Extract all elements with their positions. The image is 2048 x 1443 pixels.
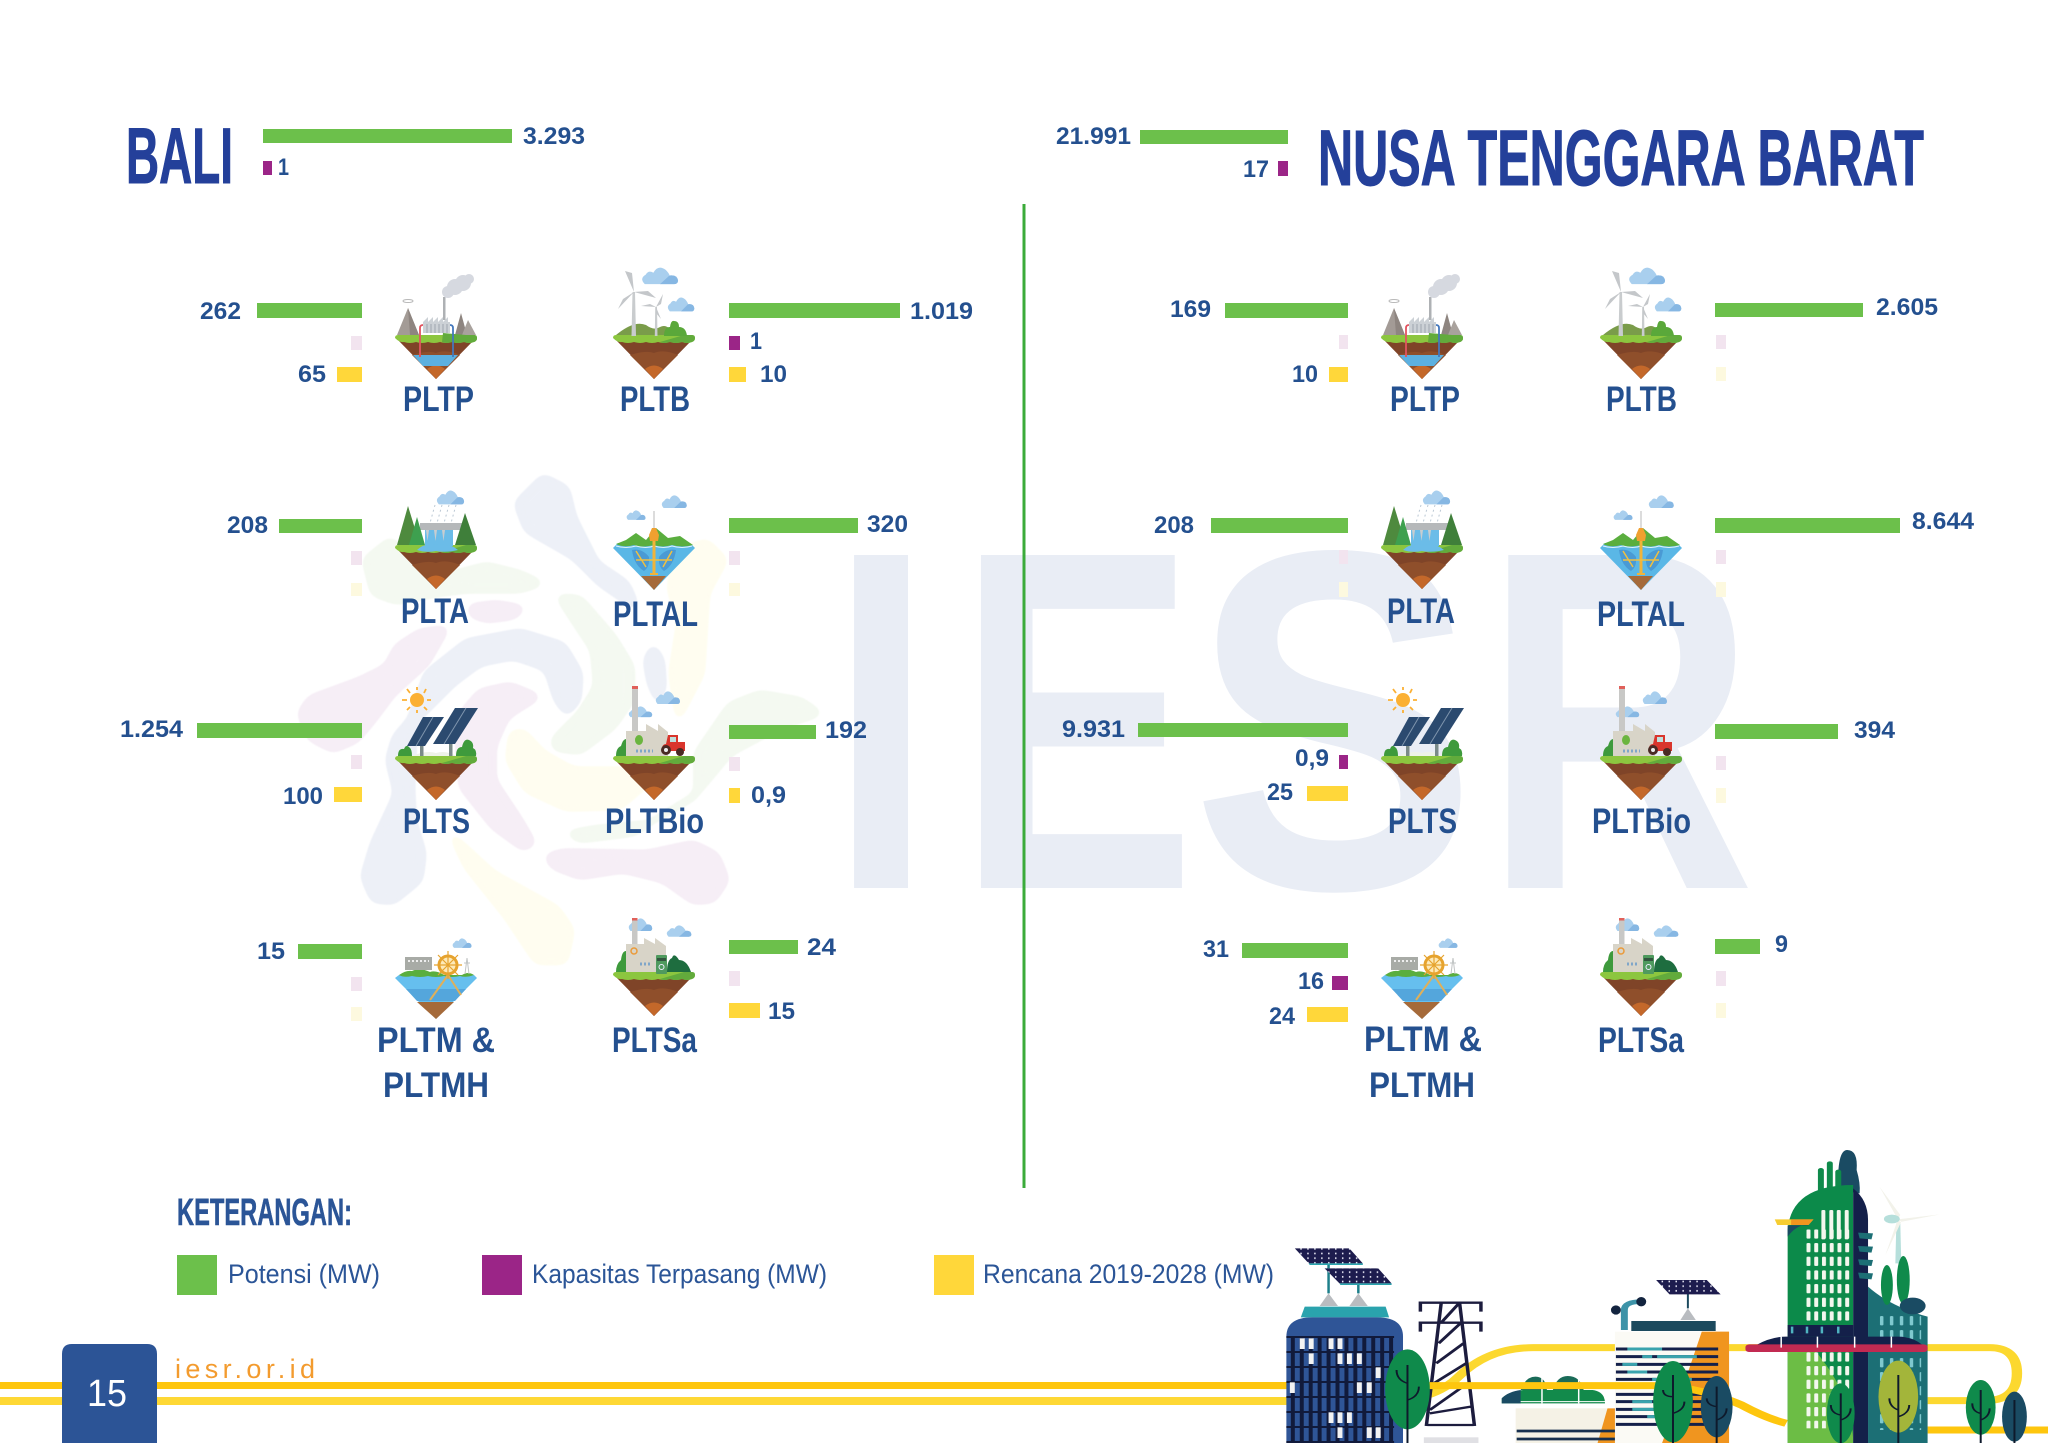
trees beside striped tower <box>1653 1361 1733 1443</box>
panel: Bali PLTB <box>613 268 973 419</box>
panel: Bali PLTA: PLTA <box>401 592 469 631</box>
watermark: IESR text: E <box>957 451 1196 991</box>
chart: Bali totals: 1 <box>278 154 289 181</box>
rail track: lower line <box>1270 1348 2048 1430</box>
building: striped tower <box>1611 1280 1729 1443</box>
panel: Bali PLTB: PLTB <box>620 380 690 419</box>
panel: Bali PLTSa <box>612 918 836 1060</box>
panel: Bali PLTS: 100 <box>283 783 323 810</box>
panel: NTB PLTS <box>1062 687 1464 841</box>
watermark: IESR text: R <box>1483 450 1756 991</box>
chart: Bali totals <box>263 123 585 181</box>
panel: NTB PLTS: 0,9 <box>1295 745 1329 772</box>
panel: NTB PLTSa: 9 <box>1775 931 1788 958</box>
green shrubs on skyscraper <box>1881 1256 1926 1314</box>
panel: Bali PLTAL: PLTAL <box>613 595 698 634</box>
panel: NTB PLTS: 25 <box>1267 779 1293 806</box>
building: green skyscraper <box>1775 1150 1928 1443</box>
panel: NTB PLTB <box>1600 268 1938 419</box>
panel: Bali PLTSa: 15 <box>768 998 795 1025</box>
panel: Bali PLTAL <box>613 495 908 634</box>
panel: NTB PLTM & PLTMH: 24 <box>1269 1003 1295 1030</box>
legend <box>177 1192 1274 1295</box>
legend item: Rencana <box>934 1255 1274 1295</box>
panel: NTB PLTBio: 394 <box>1854 717 1895 744</box>
chart: Bali totals: 3.293 <box>523 123 585 150</box>
panel: Bali PLTP: 262 <box>200 298 241 325</box>
legend item: Potensi: Potensi (MW) <box>228 1259 380 1289</box>
website url: iesr.or.id <box>175 1354 315 1384</box>
panel: NTB PLTA: PLTA <box>1387 592 1455 631</box>
panel: Bali PLTBio <box>605 686 867 841</box>
panel: NTB PLTM & PLTMH: PLTM & <box>1364 1020 1482 1059</box>
panel: Bali PLTM & PLTMH: PLTMH <box>383 1066 489 1105</box>
panel: NTB PLTS: 9.931 <box>1062 716 1125 743</box>
building: blue tower with solar panels <box>1286 1248 1403 1443</box>
panel: NTB PLTP: PLTP <box>1390 380 1460 419</box>
panel: NTB PLTP: 169 <box>1170 296 1211 323</box>
panel: Bali PLTB: 1 <box>750 328 762 355</box>
wind turbine <box>1879 1187 1940 1263</box>
chart: NTB totals: 17 <box>1243 156 1269 183</box>
panel: Bali PLTBio: PLTBio <box>605 802 704 841</box>
panel: NTB PLTAL: 8.644 <box>1912 508 1974 535</box>
panel: NTB PLTM & PLTMH: 16 <box>1298 968 1324 995</box>
panel: Bali PLTA <box>227 490 477 631</box>
panel: NTB PLTAL <box>1597 495 1974 634</box>
panel: Bali PLTBio: 0,9 <box>751 782 786 809</box>
heading: Bali: BALI <box>126 111 233 200</box>
page number tab <box>62 1344 157 1443</box>
transmission pylon <box>1420 1303 1481 1443</box>
chart: NTB totals: 21.991 <box>1056 123 1131 150</box>
panel: NTB PLTAL: PLTAL <box>1597 595 1685 634</box>
panel: NTB PLTP <box>1170 274 1463 419</box>
panel: Bali PLTS <box>120 687 478 841</box>
tree beside blue tower <box>1385 1349 1430 1443</box>
panel: Bali PLTSa: PLTSa <box>612 1021 697 1060</box>
panel: Bali PLTS: 1.254 <box>120 716 183 743</box>
panel: NTB PLTM & PLTMH: PLTMH <box>1369 1066 1475 1105</box>
panel: Bali PLTSa: 24 <box>807 934 836 961</box>
legend item: Rencana: Rencana 2019-2028 (MW) <box>983 1259 1274 1289</box>
panel: Bali PLTB: 1.019 <box>910 298 973 325</box>
panel: NTB PLTB: PLTB <box>1606 380 1677 419</box>
monorail <box>1745 1337 1928 1352</box>
legend item: Potensi <box>177 1255 380 1295</box>
legend: KETERANGAN: <box>177 1192 352 1234</box>
divider line between regions <box>1022 204 1026 1188</box>
page number tab: 15 <box>87 1373 127 1415</box>
illustration: green city <box>1270 1150 2048 1443</box>
rail track: upper line over train <box>1429 1386 1786 1423</box>
panel: NTB PLTA <box>1154 490 1463 631</box>
legend item: Kapasitas Terpasang: Kapasitas Terpasang (MW) <box>532 1259 827 1289</box>
panel: NTB PLTBio: PLTBio <box>1592 802 1691 841</box>
panel: Bali PLTM & PLTMH: PLTM & <box>377 1021 495 1060</box>
footer track lines <box>0 1382 1300 1405</box>
panel: NTB PLTSa: PLTSa <box>1598 1021 1684 1060</box>
panel: Bali PLTBio: 192 <box>825 717 867 744</box>
panel: NTB PLTSa <box>1598 918 1788 1060</box>
panel: NTB PLTM & PLTMH: 31 <box>1203 936 1229 963</box>
panel: NTB PLTS: PLTS <box>1388 802 1457 841</box>
panel: Bali PLTP: 65 <box>298 361 326 388</box>
panel: Bali PLTS: PLTS <box>403 802 470 841</box>
panel: NTB PLTB: 2.605 <box>1876 294 1938 321</box>
panel: Bali PLTM & PLTMH <box>257 938 495 1105</box>
watermark: IESR text: I <box>829 450 933 991</box>
panel: Bali PLTP <box>200 274 477 419</box>
panel: NTB PLTBio <box>1592 686 1895 841</box>
legend item: Kapasitas Terpasang <box>482 1255 827 1295</box>
panel: NTB PLTP: 10 <box>1292 361 1318 388</box>
panel: NTB PLTA: 208 <box>1154 512 1194 539</box>
panel: Bali PLTA: 208 <box>227 512 268 539</box>
watermark: swirl logo <box>300 477 820 962</box>
panel: Bali PLTM & PLTMH: 15 <box>257 938 285 965</box>
trees along the right side <box>1827 1361 2027 1443</box>
watermark: IESR text <box>829 450 1756 991</box>
train and low building <box>1502 1376 1625 1443</box>
panel: Bali PLTAL: 320 <box>867 511 908 538</box>
panel: NTB PLTM & PLTMH <box>1203 936 1482 1105</box>
chart: NTB totals <box>1056 123 1288 183</box>
watermark: IESR text: S <box>1191 450 1477 991</box>
panel: Bali PLTP: PLTP <box>403 380 474 419</box>
panel: Bali PLTB: 10 <box>760 361 787 388</box>
